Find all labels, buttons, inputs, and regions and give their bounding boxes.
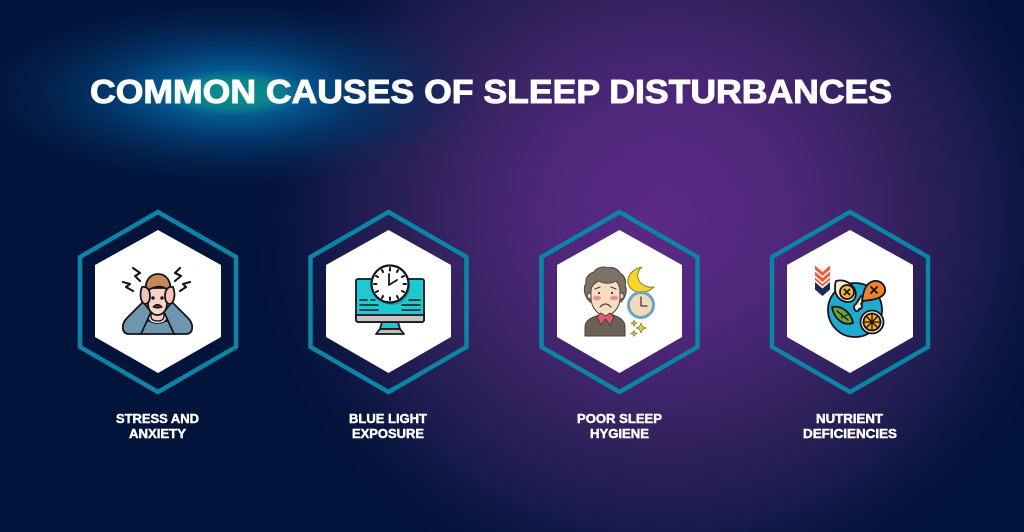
label: blue light exposure: [349, 412, 427, 441]
label: stress and anxiety: [116, 412, 199, 441]
icon: stressed person: [123, 268, 192, 334]
icon: food plate with down arrows: [815, 266, 885, 337]
title: COMMON CAUSES OF SLEEP DISTURBANCES: [90, 74, 892, 111]
label: nutrient deficiencies: DEFICIENCIES: [803, 427, 897, 441]
icon: monitor and clock: [356, 266, 424, 334]
hexagon frame: nutrient: [772, 212, 928, 392]
label: stress and anxiety: ANXIETY: [129, 427, 187, 441]
label: poor sleep hygiene: POOR SLEEP: [577, 412, 662, 426]
hexagon frame: poor sleep: [542, 212, 698, 392]
panel: stress and anxiety: [80, 212, 236, 441]
panel: nutrient deficiencies: [772, 212, 928, 441]
icon: tired person with moon and clock: [584, 267, 654, 336]
label: nutrient deficiencies: NUTRIENT: [816, 412, 883, 426]
panel: poor sleep hygiene: [542, 212, 698, 441]
label: poor sleep hygiene: [577, 412, 662, 441]
hexagon frame: blue light: [310, 212, 466, 392]
hexagon frame: stress: [80, 212, 236, 392]
label: nutrient deficiencies: [803, 412, 897, 441]
label: poor sleep hygiene: HYGIENE: [590, 427, 649, 441]
label: stress and anxiety: STRESS AND: [116, 412, 199, 426]
label: blue light exposure: EXPOSURE: [352, 427, 424, 441]
panel: blue light exposure: [310, 212, 466, 441]
label: blue light exposure: BLUE LIGHT: [349, 412, 427, 426]
